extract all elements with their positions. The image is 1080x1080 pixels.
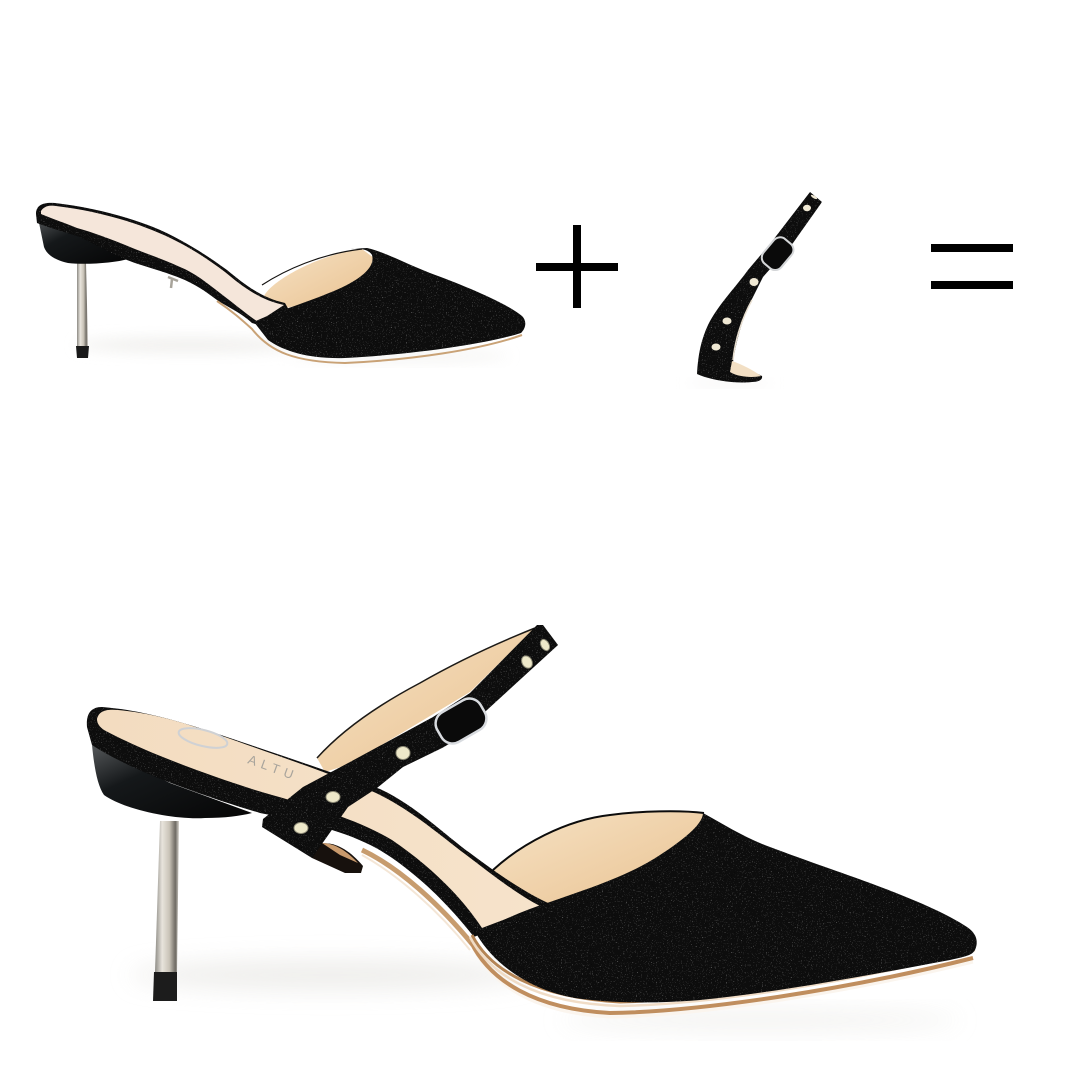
insole [97, 710, 540, 928]
floor shadow [130, 961, 960, 1027]
suede vamp [254, 248, 525, 358]
lining of the vamp [493, 812, 710, 908]
strap insole [730, 361, 761, 377]
strap buckle [431, 694, 491, 748]
heel cone [92, 745, 252, 818]
strap studs [712, 194, 818, 350]
small keeper under strap [312, 843, 363, 873]
bottom shoe: mule with strap attached [87, 625, 977, 1027]
strap shadow [688, 381, 772, 385]
strap studs [294, 638, 551, 834]
pale insole [41, 206, 284, 322]
inner edge highlight [733, 300, 752, 360]
stiletto stem [155, 821, 179, 972]
lining top edge [262, 249, 362, 285]
sole edge [217, 301, 522, 363]
heel cone [38, 218, 128, 264]
lining of the vamp [264, 249, 374, 308]
rim and quarter [36, 203, 290, 326]
floor shadow [75, 338, 510, 360]
top shoe: black suede mule [36, 203, 525, 363]
vamp collar edge [493, 811, 704, 870]
sole stripes along the arch [362, 850, 473, 950]
stiletto stem [77, 263, 88, 346]
strap lining [317, 628, 535, 772]
charm [168, 277, 178, 288]
stiletto tip [153, 972, 177, 1001]
insole brand text: ALTU [246, 752, 300, 784]
strap body [697, 192, 822, 383]
strap buckle [759, 234, 797, 273]
standalone ankle strap with buckle [688, 192, 822, 385]
suede vamp [477, 813, 977, 1002]
plus sign [536, 225, 618, 308]
equals sign [931, 244, 1013, 289]
sole stripes [470, 935, 975, 1017]
insole logo [177, 724, 229, 752]
stiletto tip [76, 346, 89, 358]
strap lining black edge [317, 628, 535, 758]
strap body [262, 625, 558, 858]
rim of heel and quarter [87, 707, 548, 937]
